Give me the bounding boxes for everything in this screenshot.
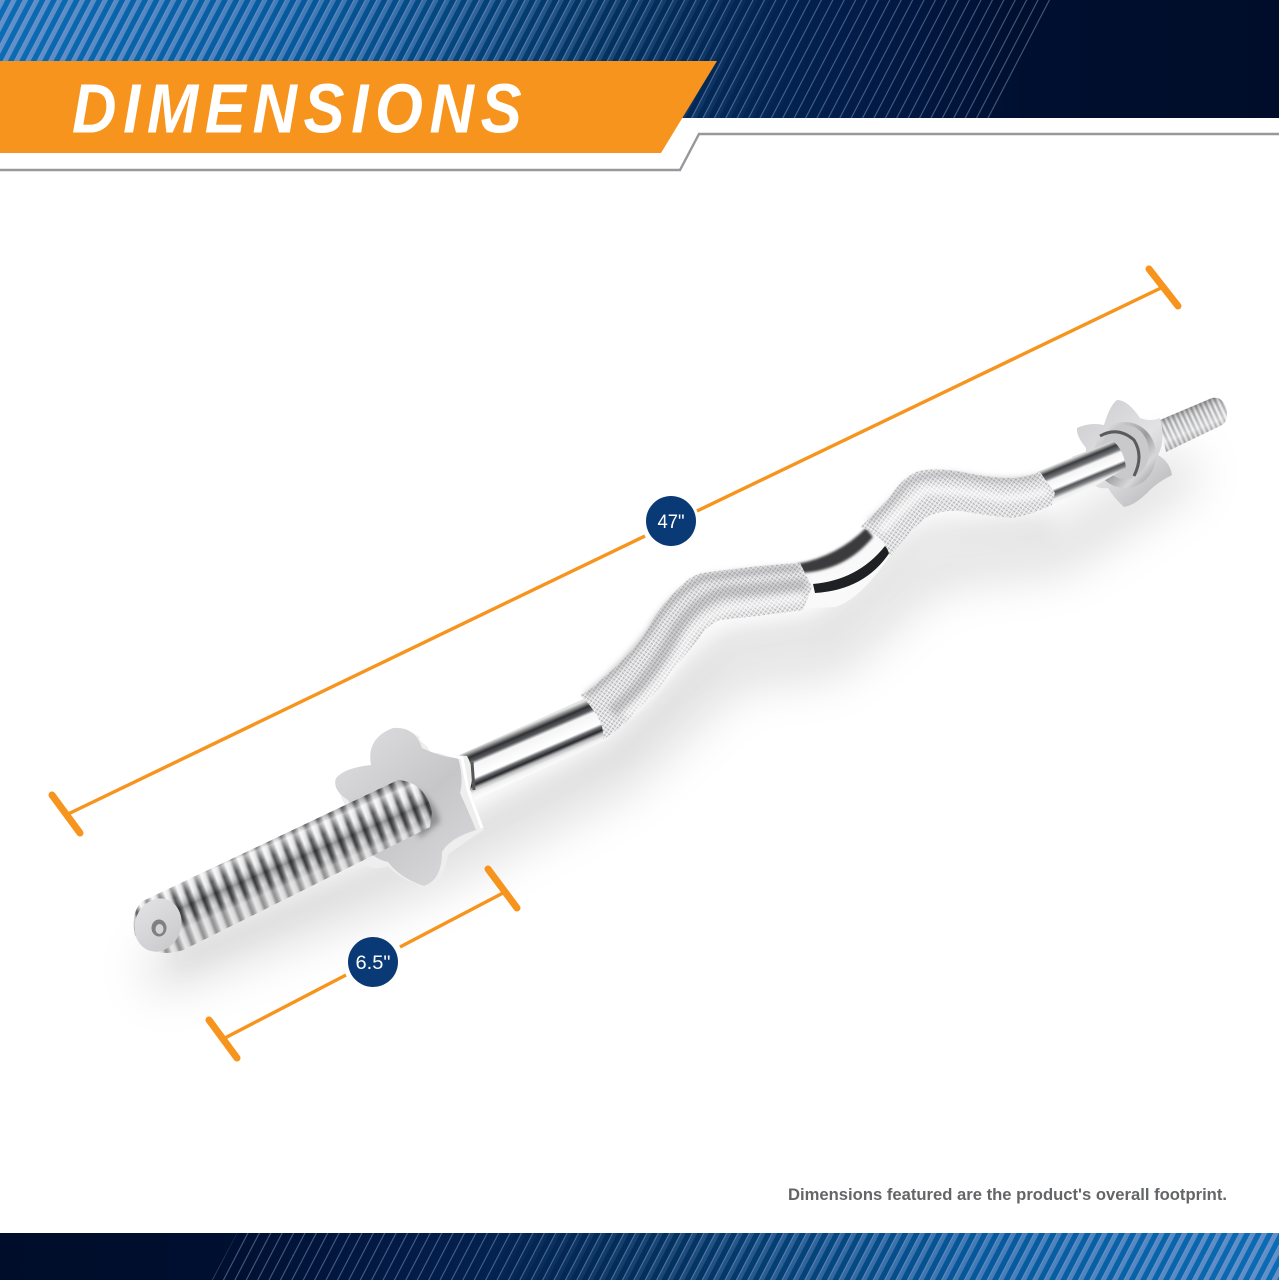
center chrome bend [797,527,892,608]
left spin-lock collar [335,728,484,888]
right spin-lock collar [1072,400,1172,507]
left threaded end [134,780,432,953]
badge: 6.5 inches: 6.5" [356,953,390,974]
dimension line: 47 inches [52,269,1178,833]
dimension line: 6.5 inches [209,869,517,1058]
product shadow [150,465,1190,975]
knurled grip right [860,469,1055,557]
left straight chrome sleeve [455,696,610,800]
bar end face [127,892,189,958]
title: DIMENSIONS [72,69,522,147]
footnote: Dimensions featured are the product's overall footprint. [788,1186,1227,1204]
title ribbon [0,61,1279,170]
barbell [127,398,1227,958]
badge: 47 inches: 47" [658,512,684,533]
bottom banner [0,1233,1279,1280]
right threaded end [1160,398,1227,452]
right straight chrome sleeve [1037,438,1132,506]
badge: 6.5 inches [348,937,398,987]
top banner [0,0,1279,118]
badge: 47 inches [646,496,696,546]
knurled grip left [580,563,812,740]
